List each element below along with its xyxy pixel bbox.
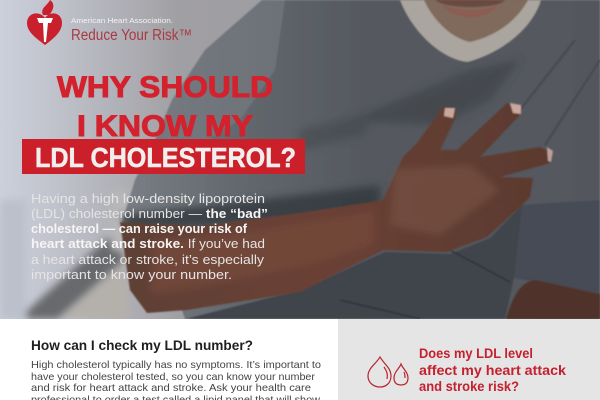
intro paragraph: heart attack and stroke. If you’ve had xyxy=(31,236,265,251)
section body text: have your cholesterol tested, so you can know your number xyxy=(31,372,316,383)
title xyxy=(22,71,305,174)
white lower section: how to check xyxy=(0,319,338,400)
intro paragraph: a heart attack or stroke, it’s especially xyxy=(31,252,265,267)
logo text: program name: Reduce Your Risk™ xyxy=(71,27,192,44)
intro paragraph: Having a high low-density lipoprotein xyxy=(31,191,265,206)
icon: two blood drops xyxy=(368,357,408,387)
icon: heart and torch xyxy=(27,0,62,45)
logo text: organisation name: American Heart Association. xyxy=(71,16,173,25)
grey side panel: LDL risk question xyxy=(338,319,600,400)
section body text: and risk for heart attack and stroke. Ask your health care xyxy=(31,383,311,394)
logo: American Heart Association Reduce Your Risk xyxy=(27,0,192,45)
panel heading xyxy=(419,345,566,394)
intro paragraph: important to know your number. xyxy=(31,267,232,282)
lower right arm xyxy=(506,280,600,319)
title line 1: WHY SHOULD xyxy=(57,71,273,104)
hero photo: man holding chest xyxy=(0,0,600,319)
panel heading: Does my LDL level xyxy=(419,345,533,361)
forearm and hand xyxy=(120,103,553,313)
section heading: How can I check my LDL number? xyxy=(31,337,253,353)
fingernails xyxy=(444,108,455,118)
shirt xyxy=(120,0,600,319)
title line 2: I KNOW MY xyxy=(77,110,253,143)
background: lower-left shadow band xyxy=(0,190,130,319)
section body text: High cholesterol typically has no symptoms. It’s important to xyxy=(31,360,321,371)
panel heading: and stroke risk? xyxy=(419,378,519,394)
intro paragraph: (LDL) cholesterol number — the “bad” xyxy=(31,206,268,221)
panel heading: affect my heart attack xyxy=(419,362,566,378)
intro paragraph xyxy=(31,191,268,282)
section body text xyxy=(31,360,321,400)
intro paragraph: cholesterol — can raise your risk of xyxy=(31,221,248,236)
neck and beard xyxy=(400,0,541,62)
title banner: LDL cholesterol: LDL CHOLESTEROL? xyxy=(35,142,296,173)
